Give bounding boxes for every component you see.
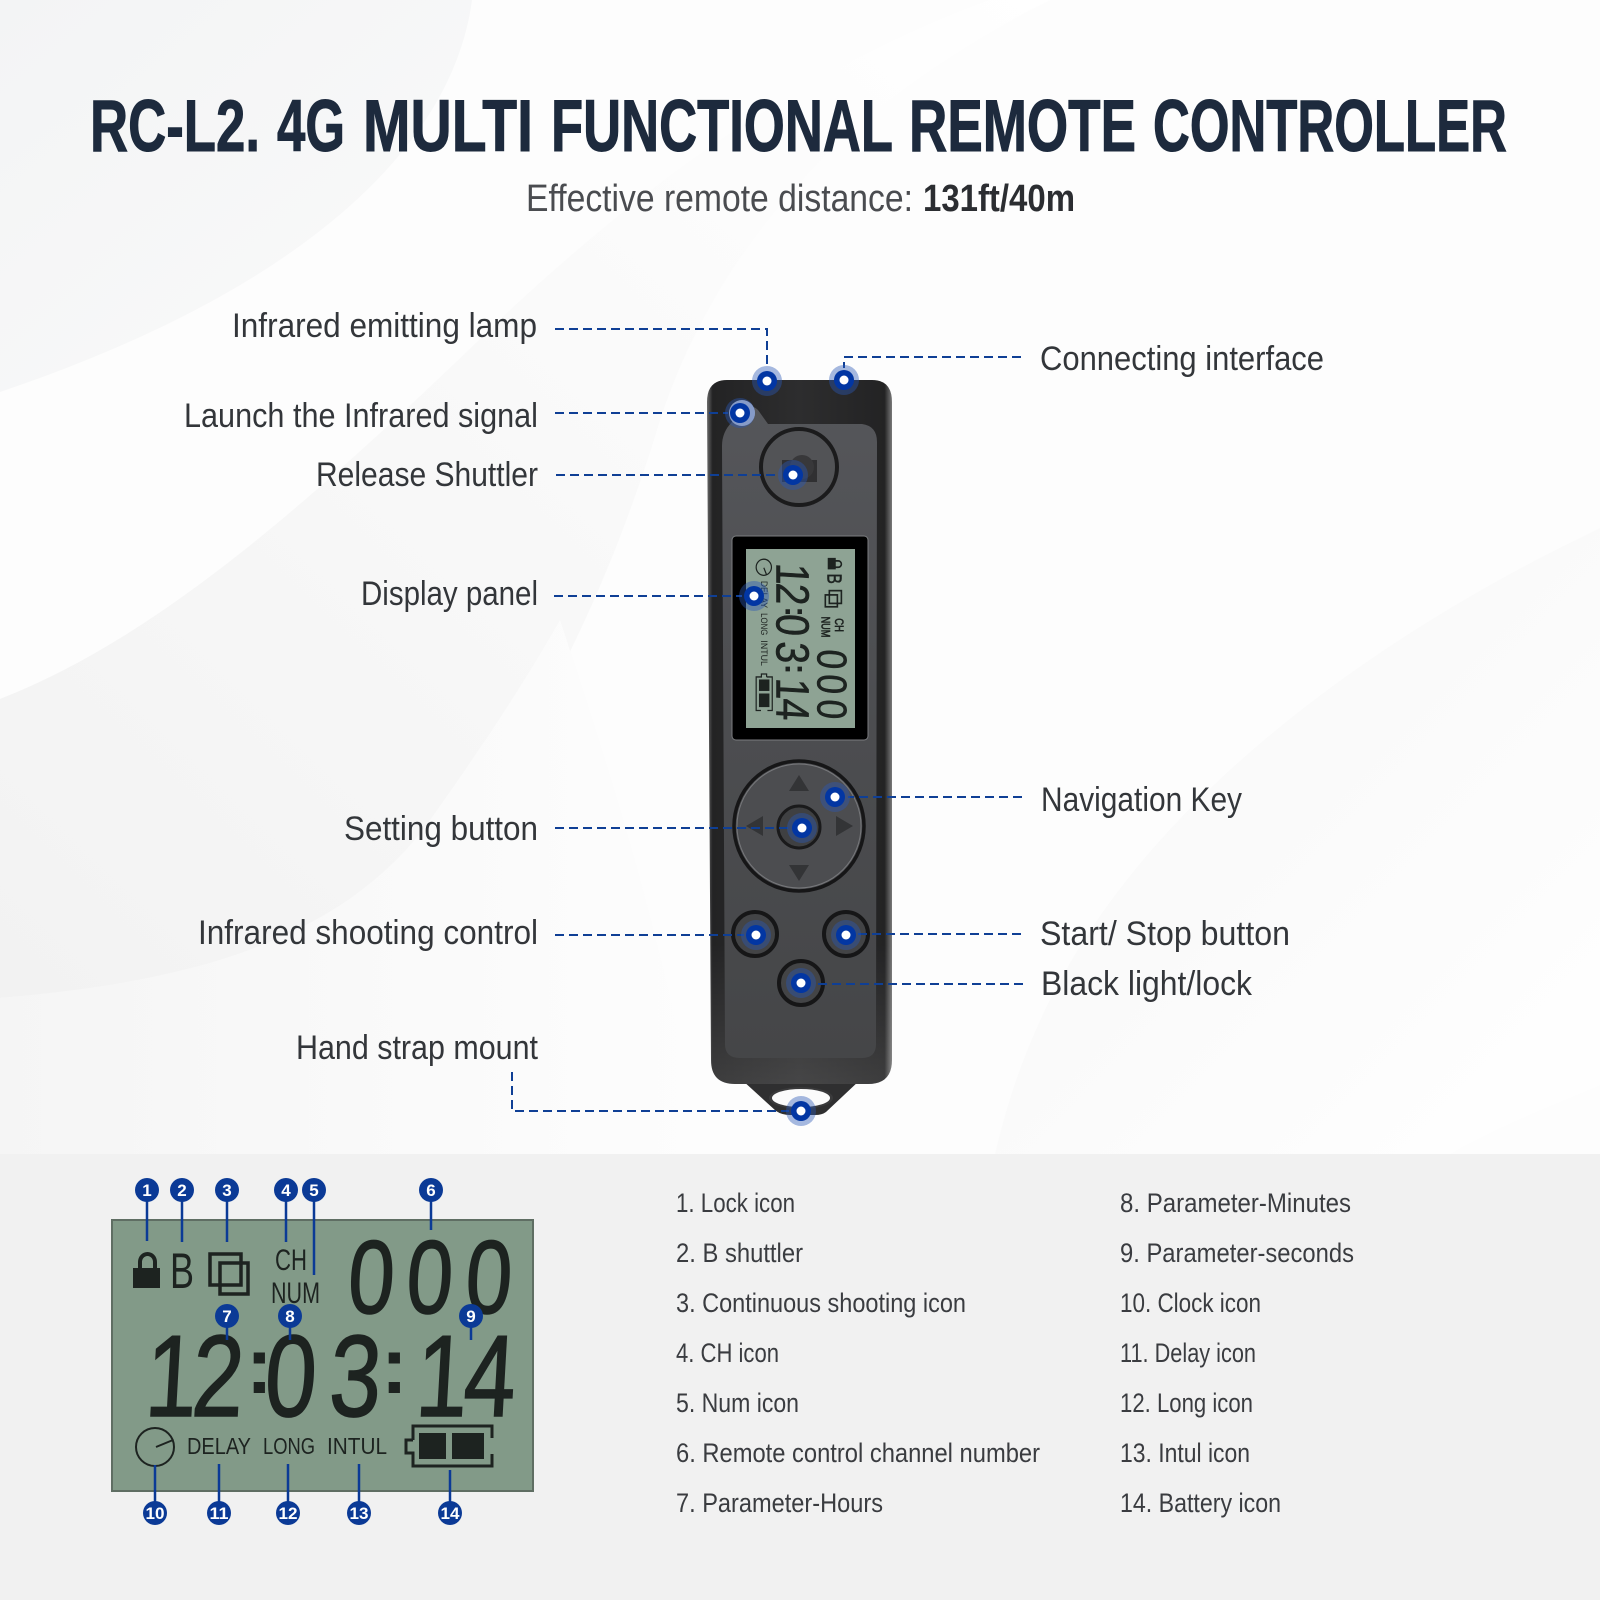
connector lines bbox=[147, 1200, 471, 1502]
callout: infrared emitting lamp: Infrared emitting lamp bbox=[232, 307, 537, 345]
legend list: column 2: 14. Battery icon bbox=[1120, 1488, 1281, 1518]
strap mount bbox=[742, 1080, 860, 1115]
time colons bbox=[246, 1321, 408, 1410]
callout: black light lock: Black light/lock bbox=[1041, 965, 1253, 1003]
legend list: column 2 bbox=[1120, 1188, 1354, 1518]
subtitle: Effective remote distance: bbox=[526, 178, 913, 220]
small LCD screen: INTUL bbox=[758, 640, 769, 666]
number badges: 6 bbox=[426, 1181, 436, 1200]
subtitle: 131ft/40m bbox=[923, 178, 1075, 220]
legend list: column 1: 1. Lock icon bbox=[676, 1188, 795, 1218]
device body bbox=[707, 380, 892, 1084]
callout: hand strap mount: Hand strap mount bbox=[296, 1029, 538, 1067]
time colons: : bbox=[246, 1321, 273, 1410]
callout: start stop button: Start/ Stop button bbox=[1040, 915, 1290, 953]
title: RC-L2. bbox=[90, 86, 260, 167]
number badges: 7 bbox=[222, 1307, 232, 1326]
callout: launch the infrared signal: Launch the Infrared signal bbox=[184, 397, 538, 435]
background swooshes bbox=[0, 0, 1600, 1160]
callout: black light lock bbox=[786, 965, 1253, 1003]
time digits bbox=[142, 1312, 520, 1441]
callout: hand strap mount bbox=[296, 1029, 816, 1126]
number badges: 3 bbox=[222, 1181, 232, 1200]
small LCD screen: 000 bbox=[808, 648, 854, 720]
legend list: column 2: 12. Long icon bbox=[1120, 1388, 1253, 1418]
number badges: 4 bbox=[281, 1181, 291, 1200]
LCD diagram bbox=[112, 1178, 533, 1525]
title bbox=[90, 86, 1507, 167]
channel digits: 000 bbox=[345, 1219, 516, 1335]
number badges: 8 bbox=[285, 1307, 295, 1326]
small LCD screen: : bbox=[778, 606, 814, 617]
legend list: column 1: 6. Remote control channel number bbox=[676, 1438, 1040, 1468]
INTUL label: INTUL bbox=[327, 1433, 387, 1459]
legend list: column 2: 11. Delay icon bbox=[1120, 1338, 1256, 1368]
title: REMOTE bbox=[909, 86, 1136, 167]
icon: battery bbox=[406, 1426, 492, 1466]
legend list: column 2: 8. Parameter-Minutes bbox=[1120, 1188, 1351, 1218]
small LCD screen: 12 bbox=[765, 562, 817, 607]
icon: clock bbox=[136, 1428, 174, 1466]
legend list: column 2: 10. Clock icon bbox=[1120, 1288, 1261, 1318]
DELAY label: DELAY bbox=[187, 1433, 251, 1459]
small LCD screen: DELAY bbox=[758, 581, 769, 609]
legend list: column 1: 5. Num icon bbox=[676, 1388, 799, 1418]
time colons: : bbox=[381, 1321, 408, 1410]
legend list: column 1: 3. Continuous shooting icon bbox=[676, 1288, 966, 1318]
legend list: column 2: 13. Intul icon bbox=[1120, 1438, 1250, 1468]
callout: infrared shooting control: Infrared shooting control bbox=[198, 914, 538, 952]
display frame bbox=[732, 536, 868, 740]
legend list: column 1: 4. CH icon bbox=[676, 1338, 779, 1368]
callout: release shuttler bbox=[316, 456, 808, 494]
small LCD screen: LONG bbox=[758, 613, 769, 635]
bottom panel background bbox=[0, 1154, 1600, 1600]
callout: display panel bbox=[361, 575, 769, 613]
legend list: column 2: 9. Parameter-seconds bbox=[1120, 1238, 1354, 1268]
title: MULTI bbox=[363, 86, 533, 167]
legend list: column 1: 7. Parameter-Hours bbox=[676, 1488, 883, 1518]
callout: release shuttler: Release Shuttler bbox=[316, 456, 538, 494]
small LCD screen: 14 bbox=[765, 677, 817, 722]
number badges: 10 bbox=[146, 1504, 164, 1523]
NUM label: NUM bbox=[271, 1277, 320, 1310]
icon: lock bbox=[133, 1252, 160, 1288]
time digits: 12 bbox=[142, 1312, 248, 1441]
title: FUNCTIONAL bbox=[551, 86, 893, 167]
callout: infrared emitting lamp bbox=[232, 307, 782, 396]
shutter button bbox=[761, 429, 837, 505]
small LCD screen: B bbox=[823, 574, 845, 584]
legend list: column 1 bbox=[676, 1188, 1040, 1518]
small LCD screen bbox=[746, 549, 855, 728]
number badges: 14 bbox=[440, 1504, 460, 1523]
callout: connecting interface bbox=[829, 340, 1324, 395]
callout: navigation key bbox=[820, 781, 1242, 819]
small LCD screen: NUM bbox=[819, 617, 832, 637]
callout: infrared shooting control bbox=[198, 914, 771, 952]
number badges: 13 bbox=[350, 1504, 368, 1523]
number badges: 1 bbox=[142, 1181, 152, 1200]
faceplate bbox=[722, 405, 877, 1058]
number badges: 5 bbox=[309, 1181, 319, 1200]
small LCD screen: : bbox=[778, 663, 814, 675]
CH label: CH bbox=[275, 1244, 307, 1277]
LCD screen bbox=[112, 1220, 533, 1491]
callout: navigation key: Navigation Key bbox=[1041, 781, 1242, 819]
round buttons bbox=[733, 912, 868, 1005]
callout: display panel: Display panel bbox=[361, 575, 538, 613]
title: 4G bbox=[277, 86, 345, 167]
B shutter mark: B bbox=[170, 1243, 194, 1299]
infrared window bbox=[729, 400, 755, 426]
navigation pad bbox=[734, 761, 864, 891]
time digits: 03 bbox=[262, 1312, 385, 1441]
callout: start stop button bbox=[831, 915, 1290, 953]
number badges: 2 bbox=[177, 1181, 187, 1200]
icon: continuous shooting bbox=[210, 1254, 248, 1294]
small LCD screen: CH bbox=[832, 618, 846, 632]
callout: setting button bbox=[344, 810, 817, 848]
legend list: column 1: 2. B shuttler bbox=[676, 1238, 803, 1268]
time digits: 14 bbox=[413, 1312, 520, 1441]
small LCD screen: 03 bbox=[765, 613, 817, 665]
callout: launch the infrared signal bbox=[184, 397, 755, 435]
number badges: 12 bbox=[278, 1504, 298, 1523]
LONG label: LONG bbox=[263, 1433, 315, 1459]
number badges bbox=[135, 1178, 483, 1525]
callout: setting button: Setting button bbox=[344, 810, 538, 848]
callout: connecting interface: Connecting interface bbox=[1040, 340, 1324, 378]
number badges: 11 bbox=[210, 1504, 228, 1523]
number badges: 9 bbox=[466, 1307, 476, 1326]
remote controller device bbox=[707, 380, 892, 1115]
